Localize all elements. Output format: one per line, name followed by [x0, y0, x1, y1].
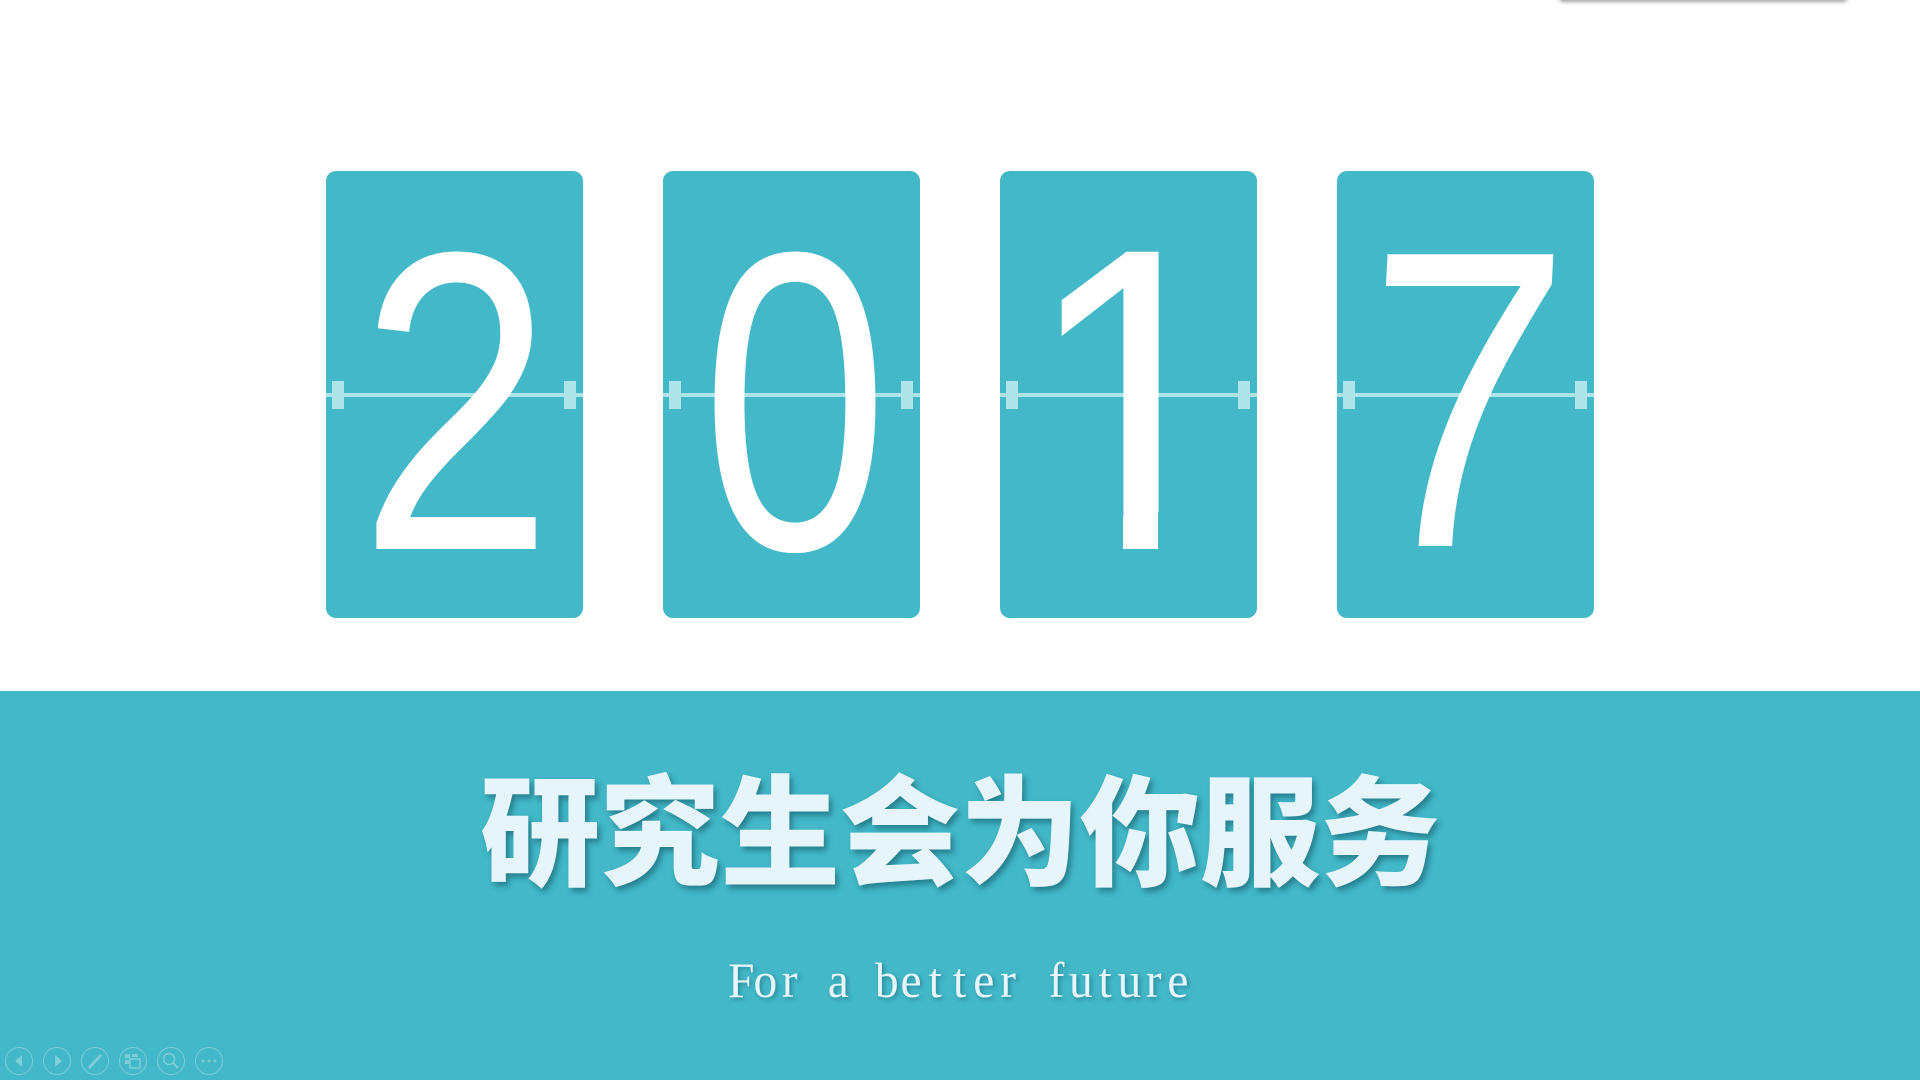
subtitle: For a better future — [728, 953, 1188, 1008]
panel: bottom band — [0, 691, 1920, 1080]
title: 研究生会为你服务 — [480, 768, 1440, 902]
slideshow toolbar icons — [5, 1047, 223, 1075]
